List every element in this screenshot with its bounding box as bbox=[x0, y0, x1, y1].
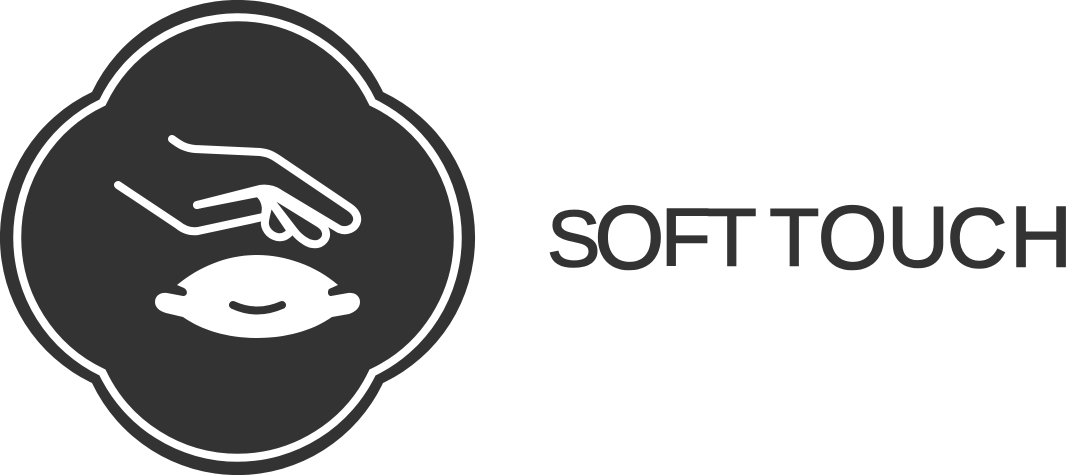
title: SOFT TOUCH: F bbox=[661, 192, 711, 284]
quatrefoil dark background bbox=[0, 0, 475, 475]
pillow body bbox=[155, 255, 360, 338]
title: SOFT TOUCH: S bbox=[547, 194, 600, 283]
title: SOFT TOUCH: U bbox=[887, 190, 949, 286]
icon badge: quatrefoil bbox=[0, 0, 475, 475]
pillow crease bbox=[233, 305, 282, 310]
title: SOFT TOUCH: T bbox=[769, 192, 819, 284]
title: SOFT TOUCH: C bbox=[947, 191, 1007, 285]
title: SOFT TOUCH: T bbox=[707, 192, 757, 284]
title: SOFT TOUCH: O bbox=[818, 188, 888, 288]
quatrefoil white inner outline bbox=[17, 17, 458, 458]
icon: hand bbox=[118, 139, 357, 244]
icon: pillow bbox=[155, 255, 360, 338]
title: SOFT TOUCH: O bbox=[594, 188, 664, 288]
